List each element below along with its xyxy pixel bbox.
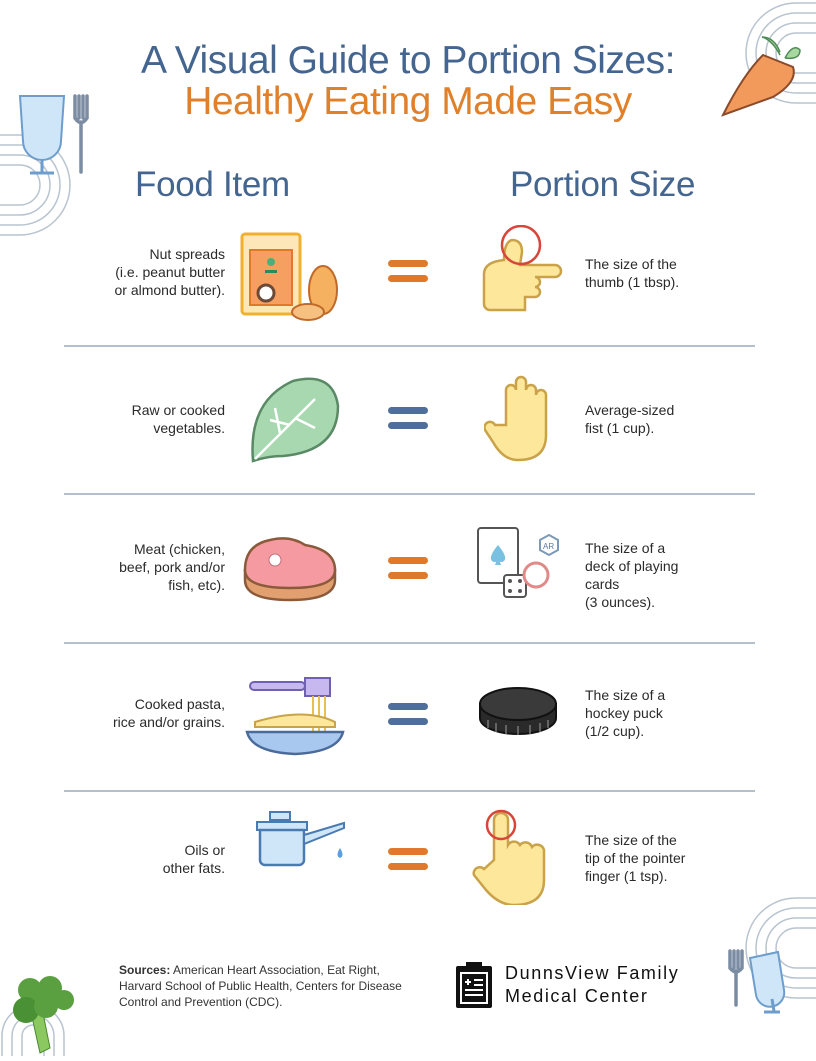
text: hockey puck <box>585 687 666 739</box>
decoration: bottom-left arcs with broccoli <box>1 976 74 1056</box>
icon: playing cards <box>477 527 559 598</box>
logo: clinic <box>456 962 679 1008</box>
heading: food item: Food Item <box>135 165 290 204</box>
text: thumb: thumb (1 tbsp). <box>585 274 679 290</box>
text: oils <box>163 842 225 876</box>
text: finger tip: The size of the <box>585 832 677 848</box>
icon: oil pot <box>256 811 345 866</box>
text: vegetables <box>132 402 225 436</box>
text: nut spreads <box>114 246 225 298</box>
text: nut spreads: (i.e. peanut butter <box>115 264 225 280</box>
equals sign <box>388 260 428 282</box>
text: oils: Oils or <box>185 842 225 858</box>
text: thumb <box>585 256 679 290</box>
equals sign <box>388 407 428 429</box>
text: finger tip <box>585 832 686 884</box>
text: hockey puck: hockey puck <box>585 705 663 721</box>
icon: nut butter jar <box>240 232 338 321</box>
text: vegetables: Raw or cooked <box>132 402 225 418</box>
text: pasta: Cooked pasta, <box>135 696 225 712</box>
text: meat: beef, pork and/or <box>119 559 225 575</box>
text: oils: other fats. <box>163 860 225 876</box>
text: meat: Meat (chicken, <box>134 541 225 557</box>
text: vegetables: vegetables. <box>153 420 225 436</box>
icon: steak <box>244 537 336 602</box>
row 2: vegetables <box>132 376 674 463</box>
row 1: nut spreads <box>114 225 679 321</box>
text: deck of cards: The size of a <box>585 540 665 556</box>
text: nut spreads: or almond butter). <box>114 282 225 298</box>
logo: clinic: Medical Center <box>505 986 648 1006</box>
icon: hockey puck <box>479 687 557 735</box>
text: nut spreads: Nut spreads <box>150 246 225 262</box>
icon: pointer finger <box>472 810 546 905</box>
decoration: bottom-right arcs with fork and glass <box>728 897 816 1014</box>
text: fist: fist (1 cup). <box>585 420 654 436</box>
icon: spinach leaf <box>251 378 340 463</box>
text: deck of cards: deck of playing <box>585 558 678 574</box>
logo: clinic: DunnsView Family <box>505 963 679 983</box>
text: fist <box>585 402 674 436</box>
decoration: top-left arcs with glass and fork <box>0 94 89 236</box>
icon: thumb hand <box>482 225 562 312</box>
text: deck of cards: (3 ounces). <box>585 594 655 610</box>
equals sign <box>388 848 428 870</box>
row 5: oils <box>163 810 686 905</box>
sources text: Sources: American Heart Association, Eat Right, Harvard School of Public Health, Centers for Disease Control and Prevention (CDC). <box>119 963 402 1009</box>
row 3: meat <box>119 527 678 610</box>
icon: fist <box>484 376 548 462</box>
text: fist: Average-sized <box>585 402 674 418</box>
text: finger tip: finger (1 tsp). <box>585 868 667 884</box>
text: deck of cards <box>585 540 678 610</box>
heading: portion size: Portion Size <box>510 165 695 204</box>
text: finger tip: tip of the pointer <box>585 850 685 866</box>
icon: clipboard <box>456 962 492 1008</box>
text: deck of cards: cards <box>585 576 619 592</box>
text: meat <box>119 541 225 593</box>
equals sign <box>388 557 428 579</box>
row 4: pasta <box>113 677 666 756</box>
icon: pasta bowl with fork <box>245 677 345 756</box>
decoration: top-right arcs with carrot <box>721 2 816 117</box>
icon: playing cards: AR <box>543 542 554 551</box>
text: thumb: The size of the <box>585 256 677 272</box>
equals sign <box>388 703 428 725</box>
title: A Visual Guide to Portion Sizes: <box>141 39 675 82</box>
text: pasta <box>113 696 225 730</box>
text: hockey puck: (1/2 cup). <box>585 723 644 739</box>
text: meat: fish, etc). <box>168 577 225 593</box>
text: pasta: rice and/or grains. <box>113 714 225 730</box>
text: hockey puck: The size of a <box>585 687 665 703</box>
subtitle: Healthy Eating Made Easy <box>184 80 632 123</box>
